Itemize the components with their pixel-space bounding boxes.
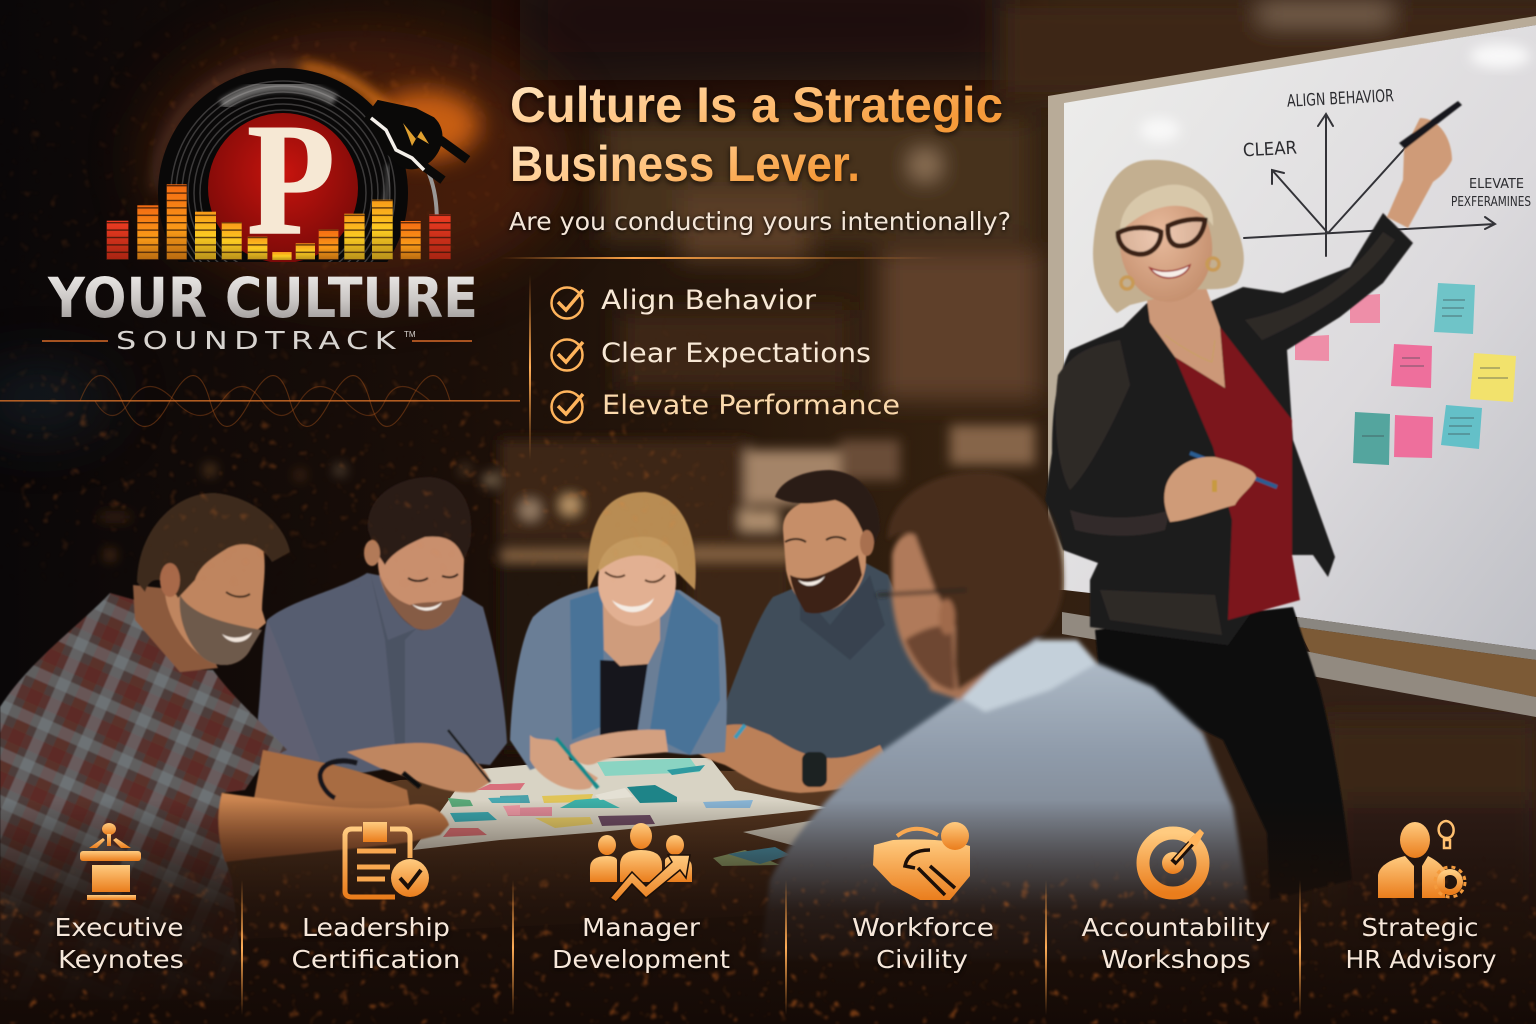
label: Leadership <box>302 913 450 942</box>
person 3 hands and pen <box>530 735 598 790</box>
equalizer bars <box>107 184 451 260</box>
label: Workforce <box>852 913 994 942</box>
icon: vinyl record: P <box>247 90 335 268</box>
earrings <box>1121 258 1219 289</box>
icon: vinyl record <box>158 68 408 262</box>
item: Clear Expectations: Clear Expectations <box>601 338 871 369</box>
person 1 neck <box>133 585 218 672</box>
person 1 upper arm, watch and pen <box>250 750 412 820</box>
face <box>1113 182 1219 308</box>
logo subtitle: SOUNDTRACK <box>116 326 402 355</box>
person 2: man in grey shirt <box>257 477 507 793</box>
trademark: TM <box>404 330 416 339</box>
label: Workshops <box>1101 945 1251 974</box>
checklist divider <box>529 275 531 460</box>
headline: Business Lever. <box>510 136 860 192</box>
neck and chest <box>1145 285 1225 388</box>
table <box>0 758 1100 950</box>
label: Keynotes <box>58 945 184 974</box>
logo: Your Culture Soundtrack <box>42 65 480 355</box>
subheading: Are you conducting yours intentionally? <box>509 207 1011 236</box>
person 3: smiling woman in blue cardigan <box>510 492 727 790</box>
item: Elevate Performance: Elevate Performance <box>602 390 900 421</box>
label: Development <box>552 945 730 974</box>
person 1: man in plaid shirt <box>0 493 449 1000</box>
bottom fade overlay <box>0 800 1536 1024</box>
checklist <box>552 285 900 422</box>
label: Executive <box>54 913 184 942</box>
person 4 arms, hands and watch <box>692 724 892 793</box>
photo: team around table <box>0 470 1260 1000</box>
label: HR Advisory <box>1346 945 1497 974</box>
icon: clipboard with check <box>345 822 429 897</box>
icon: handshake <box>873 822 970 900</box>
icon: check 1 <box>552 288 583 318</box>
glasses <box>1118 219 1205 254</box>
service: Leadership Certification <box>292 822 460 974</box>
icon: check 3 <box>552 392 583 422</box>
icon: team with growth arrow <box>590 823 692 902</box>
whiteboard tray rail <box>1062 612 1536 717</box>
smile <box>1150 265 1190 278</box>
person 2 face <box>378 512 465 630</box>
person 1 near forearm <box>218 793 449 862</box>
sticky notes <box>1295 283 1516 465</box>
hair <box>1093 160 1244 313</box>
item: Align Behavior: Align Behavior <box>601 285 817 316</box>
label: Civility <box>876 945 968 974</box>
service dividers <box>241 880 1301 1015</box>
person 4 face <box>783 497 866 613</box>
chart: hand-drawn axes <box>1244 114 1495 256</box>
whiteboard handwritten labels: ELEVATE <box>1469 177 1524 192</box>
label: Accountability <box>1082 913 1271 942</box>
waveform <box>0 376 520 426</box>
icon: power plug <box>354 85 476 250</box>
background shelves behind team <box>100 425 1035 750</box>
red top <box>1175 327 1300 620</box>
person 4: bearded man in denim shirt <box>692 470 960 793</box>
whiteboard handwritten labels: ALIGN BEHAVIOR <box>1286 86 1395 112</box>
trousers <box>1095 607 1352 900</box>
service: Accountability Workshops <box>1082 829 1271 974</box>
service: Executive Keynotes <box>54 823 184 974</box>
pen <box>1399 101 1462 149</box>
forearm and hand <box>1387 118 1452 228</box>
hand holding marker <box>1164 453 1277 522</box>
person 1 face <box>165 524 266 665</box>
icon: check 2 <box>552 340 583 370</box>
necklace <box>1165 335 1215 362</box>
logo side lines <box>42 340 472 342</box>
label: Strategic <box>1362 913 1478 942</box>
sticky notes on the table <box>443 758 790 866</box>
icon: podium <box>80 823 141 900</box>
label: Manager <box>582 913 701 942</box>
person 5: foreground man in pale shirt from behind <box>760 472 1260 960</box>
person 2 arm and hand <box>347 743 490 793</box>
service: Manager Development <box>552 823 730 974</box>
icon: advisor with bulb and gear <box>1378 821 1465 898</box>
service: Strategic HR Advisory <box>1346 821 1497 974</box>
whiteboard handwritten labels: CLEAR <box>1242 138 1297 161</box>
panel: whiteboard <box>1048 16 1536 717</box>
whiteboard handwritten labels <box>1242 86 1531 210</box>
label: Certification <box>292 945 460 974</box>
logo wordmark: YOUR CULTURE <box>47 266 478 330</box>
icon: target with dart <box>1143 829 1204 893</box>
headline: Culture Is a Strategic <box>510 77 1003 133</box>
presenter: woman at whiteboard <box>1045 101 1462 900</box>
headline divider <box>500 257 945 259</box>
headline <box>510 77 1003 192</box>
jacket <box>1045 213 1413 645</box>
service: Workforce Civility <box>852 822 994 974</box>
